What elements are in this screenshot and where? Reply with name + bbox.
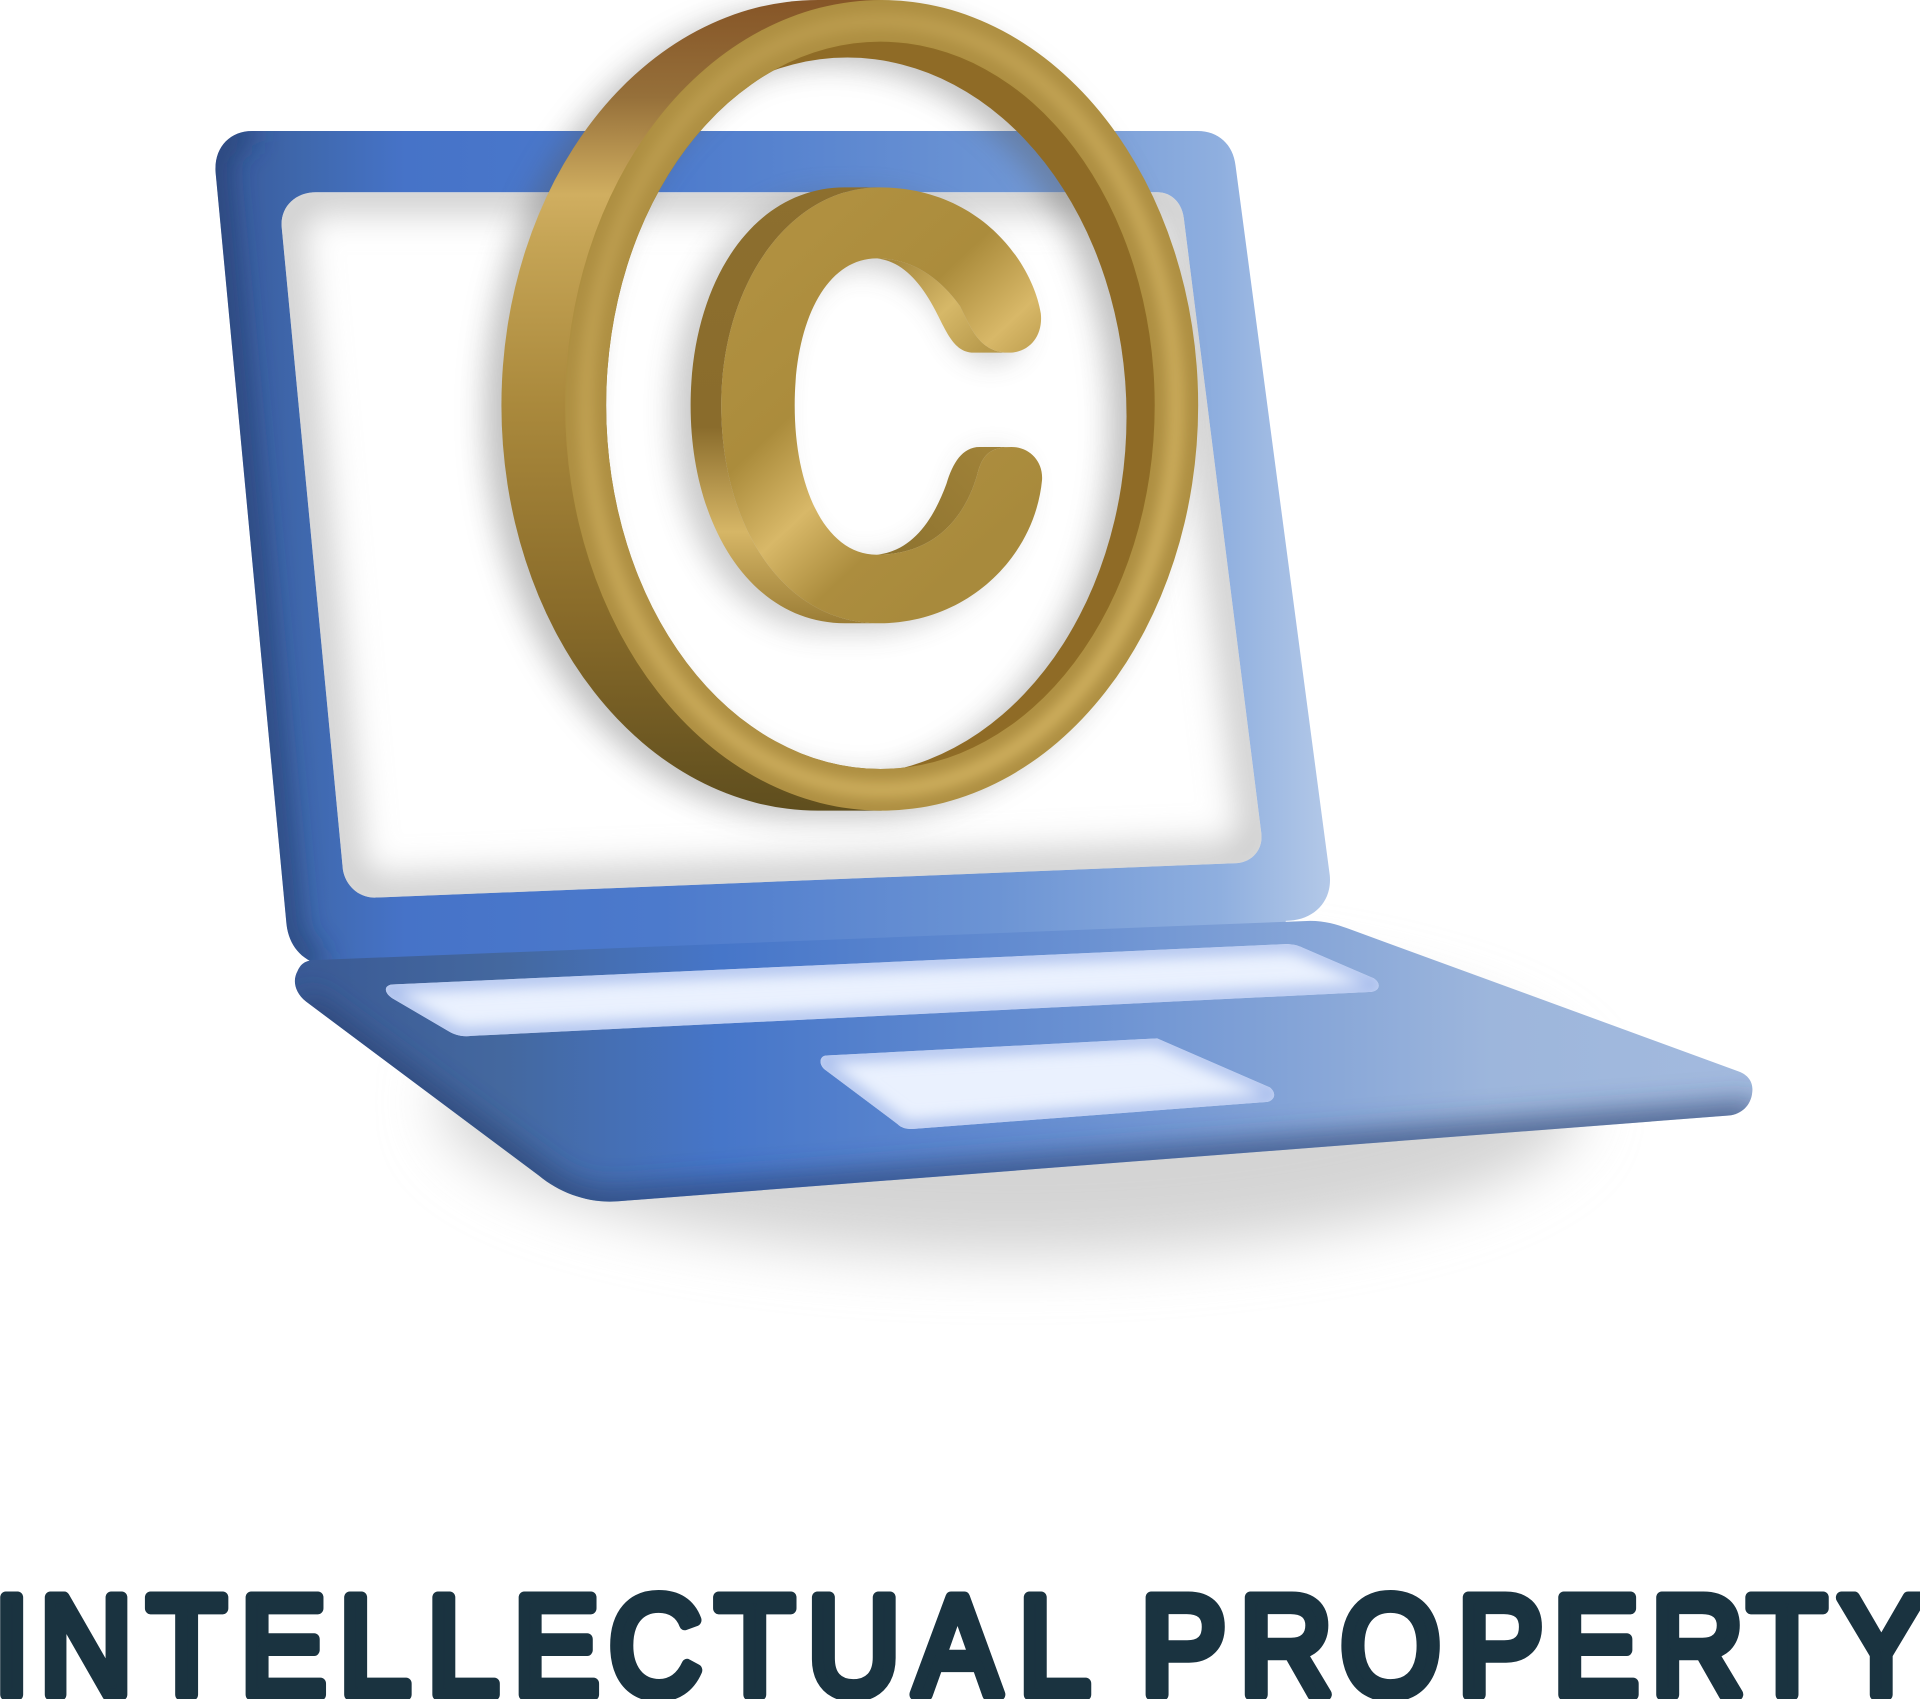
- laptop lid: [215, 131, 1330, 965]
- laptop base: [295, 921, 1758, 1205]
- laptop: [215, 131, 1758, 1205]
- laptop screen: [282, 192, 1262, 898]
- ring extrusion and inner wall: [501, 0, 1174, 811]
- keyboard area: [386, 944, 1379, 1036]
- ground shadow: [441, 949, 1580, 1255]
- copyright symbol: [484, 0, 1198, 818]
- trackpad: [821, 1038, 1274, 1129]
- ring front face: [565, 0, 1198, 811]
- ring shadow: [484, 7, 1181, 818]
- letter C shadow: [672, 195, 1025, 631]
- letter C: [691, 187, 1042, 623]
